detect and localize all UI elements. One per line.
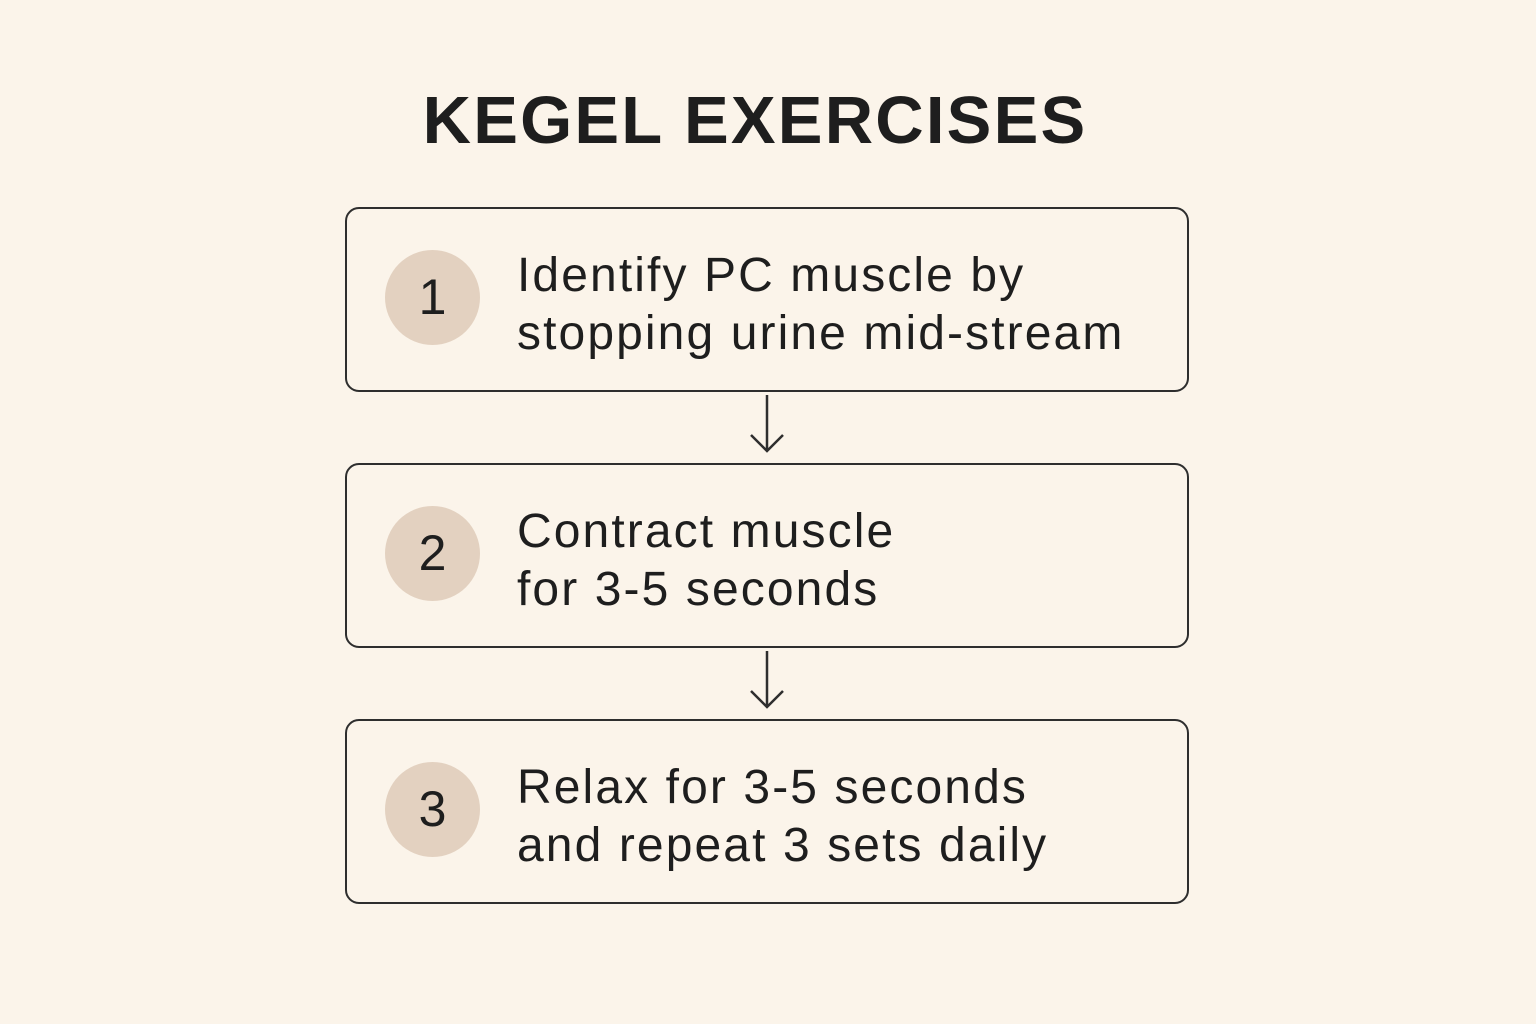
text: step 1 [517, 249, 1124, 360]
panel: step 1 [345, 207, 1189, 392]
text: step 1: stopping urine mid-stream [517, 307, 1124, 360]
text: step 3: and repeat 3 sets daily [517, 819, 1048, 872]
text: step 2 [517, 505, 895, 616]
arrow: 1 to 2 [750, 395, 784, 453]
text: step 3: Relax for 3-5 seconds [517, 761, 1028, 814]
icon: number 1: 1 [419, 269, 446, 325]
text: step 2: for 3-5 seconds [517, 563, 879, 616]
icon: number 3 [385, 762, 480, 857]
icon: number 2: 2 [419, 525, 446, 581]
arrow: 2 to 3 [750, 651, 784, 709]
panel: step 2 [345, 463, 1189, 648]
text: step 2: Contract muscle [517, 505, 895, 558]
icon: number 1 [385, 250, 480, 345]
panel: step 3 [345, 719, 1189, 904]
text: step 3 [517, 761, 1048, 872]
title: KEGEL EXERCISES [423, 83, 1087, 158]
icon: number 3: 3 [419, 781, 446, 837]
text: step 1: Identify PC muscle by [517, 249, 1025, 302]
icon: number 2 [385, 506, 480, 601]
